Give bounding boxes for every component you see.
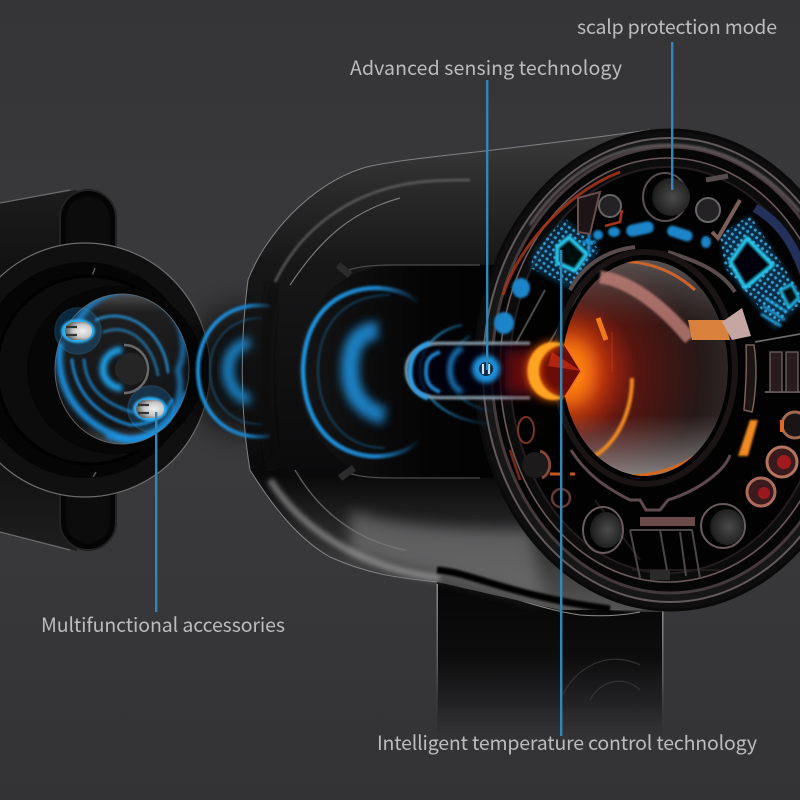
label: scalp protection mode: scalp protection mode (577, 11, 777, 40)
heating band (600, 277, 751, 340)
accessory blue waves (59, 291, 185, 440)
left small ring components (510, 417, 575, 507)
side bracket (744, 345, 756, 412)
orange bar (738, 420, 758, 456)
leader line: multifunctional accessories (155, 412, 157, 612)
accessory body (0, 190, 77, 551)
icon: red button 2 (747, 478, 775, 506)
dryer face (475, 130, 800, 610)
blue dots row (494, 312, 514, 334)
rim top highlight (530, 145, 800, 225)
icon: red button 1 (767, 447, 797, 477)
body lower highlight (350, 510, 545, 600)
top components (578, 173, 740, 238)
accessory pin top (55, 308, 101, 354)
accessory central hub (55, 294, 189, 444)
accessory disc (0, 243, 210, 497)
orange ring tip (527, 342, 581, 400)
accessory pin bottom (128, 386, 174, 432)
icon: left grey button (583, 507, 623, 553)
curved orange trace (590, 378, 632, 458)
strut lines (515, 290, 580, 345)
icon: top button (643, 173, 690, 221)
body shell (243, 130, 680, 610)
left circuit patch (530, 218, 600, 290)
lens collar (555, 247, 735, 510)
blue air wave 2 (303, 288, 420, 456)
inner cylinder (298, 265, 545, 478)
icon: right grey button (701, 504, 745, 548)
right circuit patch (720, 215, 800, 330)
handle (436, 582, 664, 760)
right components (738, 345, 800, 506)
leader line: intelligent temperature control (560, 250, 562, 736)
leader line: scalp protection mode (671, 42, 673, 190)
heating lens (554, 260, 730, 476)
top left switch (578, 192, 622, 234)
red glow (505, 350, 539, 394)
label: intelligent temperature control technology: Intelligent temperature control technology (377, 727, 757, 756)
red rim accent (503, 172, 620, 295)
label: advanced sensing technology: Advanced sensing technology (350, 52, 622, 81)
glowing core (554, 334, 590, 410)
face outer rim (475, 130, 800, 610)
airflow shadow (192, 308, 288, 432)
dryer body (242, 130, 680, 610)
bottom components (510, 417, 745, 580)
body black band (437, 570, 610, 609)
body left band (265, 285, 275, 470)
icon: blue sensor (472, 355, 500, 383)
blue circuit arc (494, 215, 800, 334)
capsule outline (406, 343, 530, 398)
leader line: advanced sensing technology (486, 80, 488, 370)
label: multifunctional accessories: Multifunctional accessories (41, 609, 285, 638)
nozzle sensor capsule (406, 325, 581, 424)
body top rim highlight (275, 180, 470, 282)
sensor blue waves (420, 325, 495, 424)
side connectors (770, 352, 782, 392)
blue air wave 1 (198, 305, 270, 437)
accessory hub cap (99, 344, 149, 394)
bottom bracket (630, 517, 700, 580)
top right switch (696, 176, 740, 238)
accessory clip slots (60, 190, 116, 550)
icon: ring button (782, 412, 800, 438)
accessory: nozzle attachment (0, 190, 210, 551)
